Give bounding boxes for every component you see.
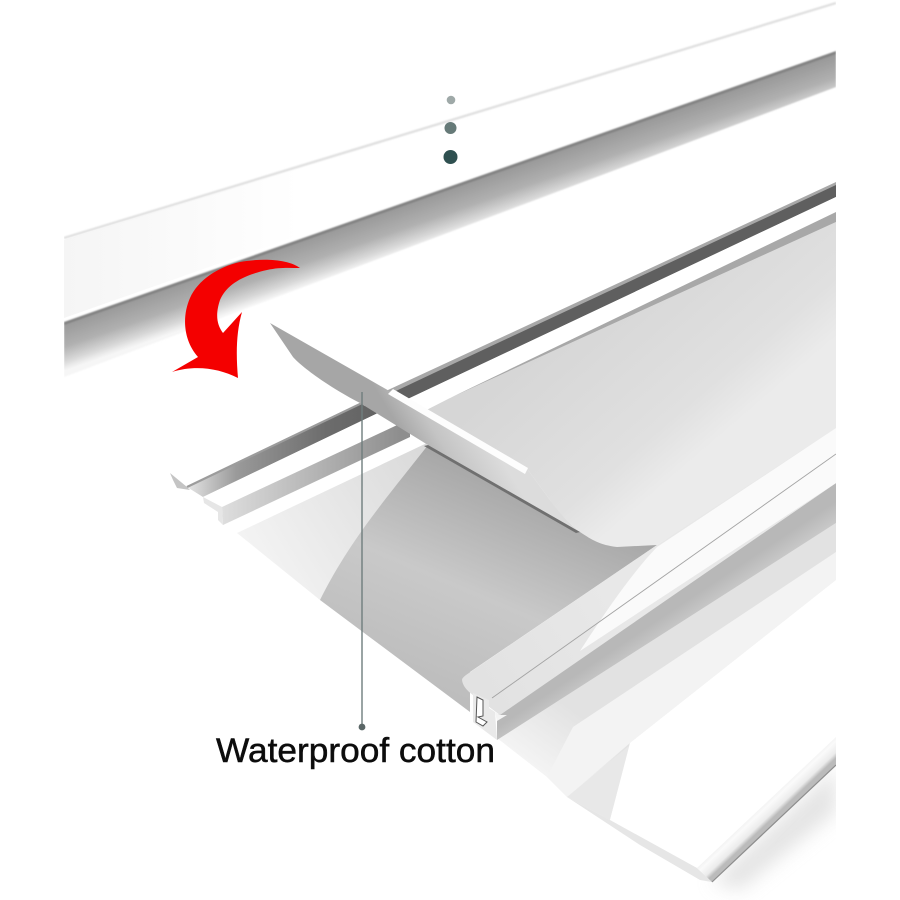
upper groove <box>64 51 836 377</box>
upper panel with top crease line <box>64 3 836 318</box>
lower floor panel <box>237 443 657 712</box>
folded flap of cotton <box>270 323 580 533</box>
red curved arrow <box>172 260 300 378</box>
progress dots <box>444 96 458 164</box>
rail with channel <box>170 182 836 525</box>
waterproof cotton sheet <box>413 222 836 547</box>
bottom white panel with rounded edge <box>570 738 836 892</box>
label: waterproof cotton: Waterproof cotton <box>216 732 495 770</box>
right rail <box>462 428 836 820</box>
leader line with end dot <box>359 392 365 730</box>
